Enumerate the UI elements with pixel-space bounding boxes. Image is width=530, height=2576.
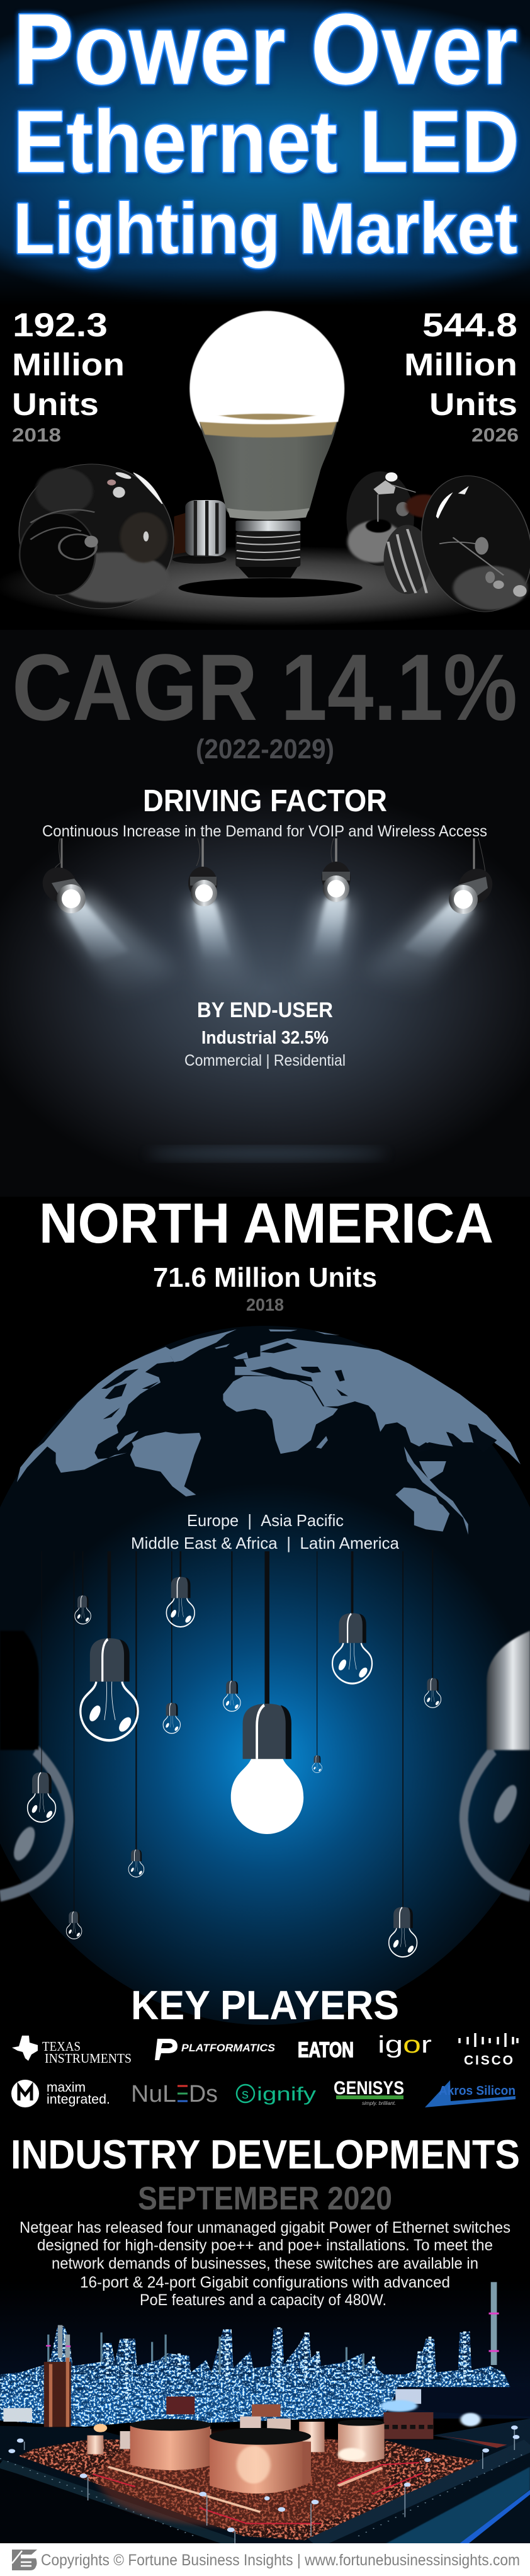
subheading: date: SEPTEMBER 2020 — [138, 2180, 392, 2217]
icon: broken bulb left — [11, 461, 227, 612]
text: development description: Netgear has released four unmanaged gigabit Power of Ethernet switches — [20, 2219, 510, 2237]
panel: title banner — [0, 0, 530, 315]
icon: spotlight 1 — [35, 838, 86, 913]
globe sphere — [0, 1326, 530, 2025]
text: development description: PoE features and a capacity of 480W. — [140, 2291, 386, 2309]
heading: key players: KEY PLAYERS — [131, 1982, 399, 2028]
text: development description: 16-port & 24-port Gigabit configurations with advanced — [80, 2274, 450, 2291]
CAGR period: (2022-2029) — [196, 734, 334, 765]
stat: year: 2018 — [246, 1295, 284, 1314]
stat: 2026 volume — [404, 307, 519, 446]
stat: 2026 volume: 544.8 — [422, 307, 517, 344]
logo: Maxim Integrated: integrated. — [47, 2092, 110, 2107]
logo: Genisys — [334, 2078, 404, 2106]
logo: Maxim Integrated — [11, 2080, 110, 2107]
logo: NuLEDs — [131, 2081, 218, 2107]
logo: Eaton: EATON — [298, 2038, 354, 2062]
text: development description: network demands of businesses, these switches are available in — [52, 2255, 478, 2272]
icon: spotlight 4 — [449, 838, 500, 914]
refinery lamps — [8, 2425, 519, 2544]
logo: Texas Instruments: TEXAS — [42, 2039, 81, 2054]
stat: 2026 volume: Units — [429, 387, 517, 422]
heading: north america: NORTH AMERICA — [39, 1192, 493, 1255]
logo: Signify: s — [242, 2086, 249, 2102]
logo: NuLEDs: Ds — [189, 2081, 218, 2107]
logo: Maxim Integrated: maxim — [47, 2080, 86, 2095]
text: other regions: Middle East & Africa | Latin America — [131, 1534, 400, 1553]
world map — [10, 1330, 521, 1535]
logo: Texas Instruments — [12, 2036, 132, 2066]
icon: spotlight 2 — [188, 838, 217, 906]
panel: key players — [11, 1982, 517, 2107]
stat: 2026 volume: Million — [404, 347, 517, 382]
panel: industry developments — [0, 2131, 530, 2544]
icon: spotlight 3 — [322, 838, 351, 902]
logo: Texas Instruments: INSTRUMENTS — [45, 2051, 132, 2066]
segment block: by end-user: Commercial | Residential — [184, 1052, 346, 1069]
beam cores — [63, 898, 473, 964]
text: driving factor detail: Continuous Increase in the Demand for VOIP and Wireless Access — [42, 823, 487, 840]
text: development description — [20, 2219, 510, 2309]
icon: blurred foreground bulb left — [0, 1631, 69, 1896]
icon: glowing LED bulb — [189, 311, 344, 520]
stat: 2026 volume: 2026 — [471, 424, 519, 446]
logo: Platformatics: PLATFORMATICS — [181, 2042, 276, 2054]
logo: Igor: ig or — [378, 2032, 432, 2058]
logo: NuLEDs: NuL — [131, 2081, 176, 2107]
text: development description: designed for high-density poe++ and poe+ installations. To meet the — [37, 2237, 493, 2254]
illuminated floor — [0, 546, 530, 625]
text: other regions — [131, 1511, 400, 1553]
title — [13, 0, 519, 269]
logo: Cisco — [460, 2033, 517, 2068]
logo: Signify: ignify — [257, 2083, 317, 2105]
logo: Genisys: simply. brilliant. — [362, 2100, 396, 2106]
heading: driving factor: DRIVING FACTOR — [143, 784, 387, 818]
light beams — [58, 894, 477, 1001]
panel: hero with light bulbs — [0, 305, 530, 630]
stat: north america volume: 71.6 Million Units — [153, 1262, 377, 1293]
logo: Signify — [237, 2083, 317, 2105]
stat: 2018 volume: Units — [12, 387, 99, 422]
segment block: by end-user: Industrial 32.5% — [201, 1028, 329, 1048]
icon: Fortune Business Insights logo — [12, 2550, 37, 2570]
segment block: by end-user: BY END-USER — [197, 998, 333, 1022]
logo: Akros Silicon: Akros Silicon — [439, 2084, 516, 2098]
stat: 2018 volume: 2018 — [12, 424, 61, 446]
logo: Platformatics — [155, 2039, 276, 2060]
stat: 2018 volume: 192.3 — [13, 307, 108, 344]
stat: 2018 volume: Million — [12, 347, 125, 382]
icon: main lit hanging bulb — [231, 1551, 303, 1834]
floor glow — [147, 1149, 386, 1159]
hanging bulbs — [28, 1549, 441, 1957]
refinery ground and tanks — [0, 2357, 530, 2544]
stat: 2018 volume — [12, 307, 125, 446]
segment block: by end-user — [184, 998, 346, 1069]
refinery sky — [0, 2280, 530, 2419]
logo: Cisco: CISCO — [464, 2053, 513, 2068]
icon: blurred foreground bulb right — [464, 1631, 530, 1896]
icon: broken bulbs right — [346, 471, 530, 615]
icon: bulb screw base — [235, 521, 300, 578]
logo: Genisys: GENISYS — [334, 2078, 404, 2099]
footer — [0, 2543, 530, 2576]
refinery skyline — [0, 2282, 510, 2427]
panel: regional section — [0, 1192, 530, 2028]
text: other regions: Europe | Asia Pacific — [187, 1511, 344, 1530]
logo: Akros Silicon — [425, 2080, 516, 2107]
panel: CAGR and spotlights — [0, 630, 530, 1197]
